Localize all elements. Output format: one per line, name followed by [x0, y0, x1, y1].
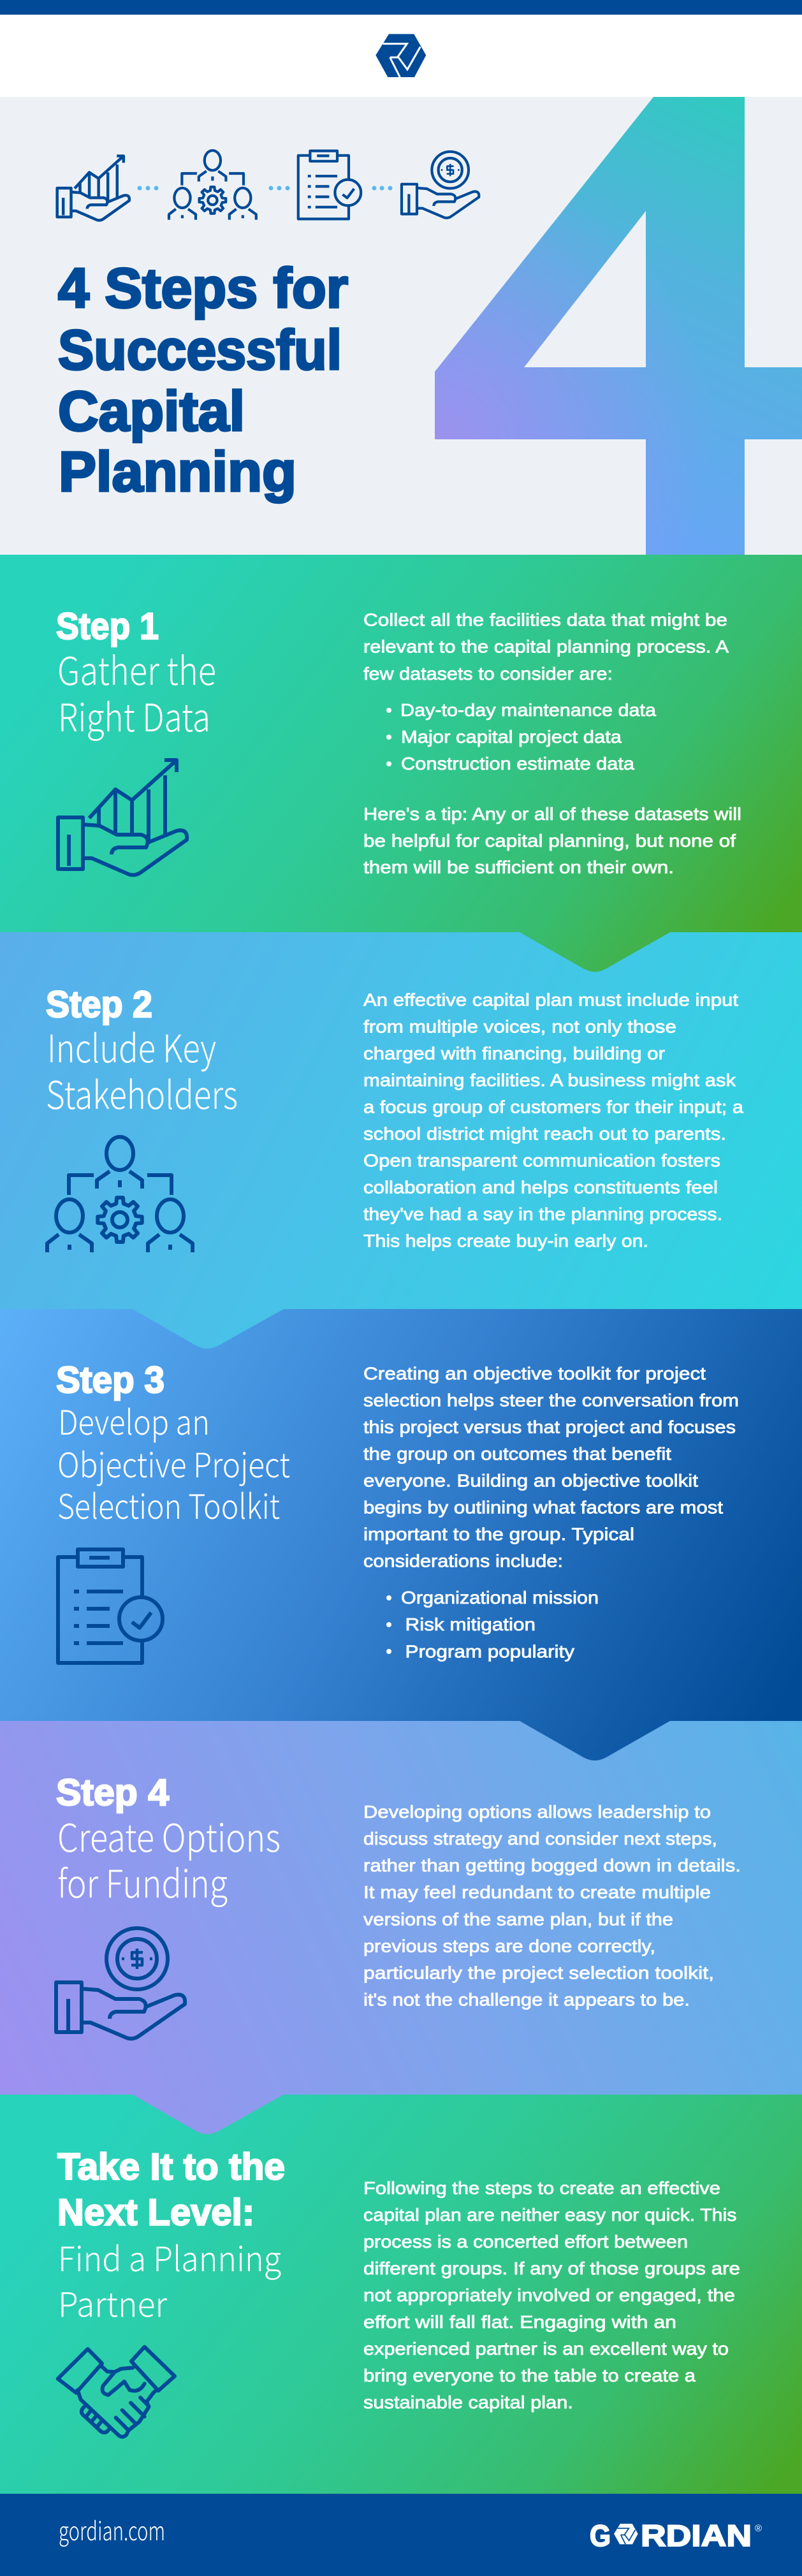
top bar: [0, 0, 802, 15]
body text: step 4: versions of the same plan, but if the: [363, 1909, 673, 1929]
icon: coin in hand: [56, 1928, 185, 2038]
icon: clipboard: [58, 1549, 163, 1663]
body text: step 2: This helps create buy-in early on.: [363, 1231, 648, 1251]
body text: step 4: Developing options allows leadership to: [363, 1802, 711, 1822]
body text: step 2: a focus group of customers for their input; a: [363, 1097, 743, 1117]
body text: step 3: Organizational mission: [401, 1588, 599, 1607]
body text: step 1: few datasets to consider are:: [363, 664, 613, 684]
body text: step 3: Program popularity: [405, 1641, 574, 1662]
footer logo: GORDIAN: RDIAN: [641, 2519, 752, 2552]
heading: step 2: Stakeholders: [46, 1065, 238, 1120]
body text: next level: sustainable capital plan.: [363, 2392, 573, 2412]
heading: next level: [57, 2146, 285, 2327]
heading: step 4: Create Options: [57, 1808, 281, 1863]
heading: step 1: Gather the: [57, 641, 216, 696]
body text: step 3: this project versus that project and focuses: [363, 1417, 736, 1437]
body text: step 3: everyone. Building an objective toolkit: [363, 1470, 698, 1491]
giant number 4: [435, 97, 802, 555]
body text: step 3: Creating an objective toolkit for project: [363, 1363, 706, 1384]
title: Planning: [59, 440, 296, 503]
body text: step 3: considerations include:: [363, 1551, 563, 1571]
dots: [372, 186, 393, 190]
icon row: [57, 150, 479, 221]
icon: stakeholders: [169, 150, 256, 220]
body text: step 4: [363, 1802, 741, 2010]
heading: next level: Find a Planning: [58, 2233, 281, 2281]
heading: next level: Take It to the: [57, 2146, 285, 2188]
body text: step 2: from multiple voices, not only those: [363, 1016, 676, 1037]
heading: step 3: Step 3: [56, 1359, 164, 1401]
heading: step 3: [56, 1359, 290, 1529]
heading: step 3: Selection Toolkit: [57, 1481, 280, 1529]
body text: step 2: Open transparent communication fosters: [363, 1150, 720, 1171]
heading: step 3: Develop an: [58, 1396, 210, 1445]
body text: step 3: begins by outlining what factors are most: [363, 1497, 723, 1518]
heading: step 2: Step 2: [46, 984, 152, 1025]
body text: step 1: Day-to-day maintenance data: [400, 700, 656, 720]
body text: step 2: they've had a say in the planning process.: [363, 1204, 722, 1224]
body text: step 4: previous steps are done correctly,: [363, 1936, 655, 1956]
arrow: step 4 notch: [133, 2095, 284, 2134]
panel: take it to the next level: [0, 2095, 802, 2494]
heading: step 1: Step 1: [56, 606, 159, 647]
arrow: step 3 notch: [520, 1721, 670, 1760]
heading: step 4: [56, 1772, 281, 1909]
body text: next level: effort will fall flat. Engaging with an: [363, 2312, 676, 2332]
body text: next level: experienced partner is an excellent way to: [363, 2339, 729, 2359]
body text: step 3: Risk mitigation: [405, 1614, 536, 1634]
body text: step 3: [363, 1363, 739, 1662]
title: Capital: [58, 379, 245, 443]
body text: step 4: discuss strategy and consider next steps,: [363, 1829, 717, 1848]
body text: step 1: them will be sufficient on their own.: [363, 857, 674, 877]
panel: step 1: [0, 555, 802, 932]
body text: step 3: important to the group. Typical: [363, 1524, 634, 1544]
title: Successful: [58, 318, 342, 381]
heading: step 2: Include Key: [47, 1018, 216, 1074]
header logo: [375, 34, 426, 77]
panel: step 2: [0, 932, 802, 1309]
icon: handshake: [58, 2347, 175, 2437]
panel: step 4: [0, 1721, 802, 2095]
body text: next level: bring everyone to the table to create a: [363, 2366, 696, 2385]
body text: step 2: An effective capital plan must include input: [363, 990, 738, 1010]
heading: step 3: Objective Project: [57, 1439, 290, 1488]
body text: step 3: selection helps steer the conversation from: [363, 1390, 739, 1410]
panel: hero: [0, 97, 802, 555]
body text: step 1: be helpful for capital planning, but none of: [363, 831, 736, 851]
body text: next level: [363, 2178, 740, 2412]
body text: step 1: Construction estimate data: [401, 754, 634, 773]
icon: stakeholders: [47, 1137, 193, 1252]
body text: step 1: Major capital project data: [401, 727, 622, 747]
heading: next level: Partner: [58, 2279, 168, 2327]
dots: [138, 186, 158, 190]
arrow: step 2 notch: [133, 1309, 284, 1349]
icon: chart in hand: [57, 156, 129, 221]
website: gordian.com: [59, 2511, 165, 2548]
body text: next level: different groups. If any of those groups are: [363, 2258, 740, 2278]
heading: step 2: [46, 984, 238, 1120]
body text: step 2: collaboration and helps constituents feel: [363, 1177, 718, 1197]
body text: step 3: the group on outcomes that benefit: [363, 1444, 671, 1464]
body text: step 2: charged with financing, building or: [363, 1043, 665, 1064]
footer logo: GORDIAN: G: [590, 2519, 611, 2552]
body text: next level: capital plan are neither easy nor quick. This: [363, 2205, 737, 2225]
body text: step 2: [363, 990, 743, 1251]
arrow: step 1 notch: [520, 932, 670, 972]
footer logo: GORDIAN: ®: [755, 2523, 762, 2534]
body text: step 4: it's not the challenge it appears to be.: [363, 1989, 690, 2010]
body text: step 2: school district might reach out to parents.: [363, 1123, 726, 1144]
body text: step 2: maintaining facilities. A business might ask: [363, 1070, 736, 1090]
panel: step 3: [0, 1309, 802, 1721]
title: [58, 256, 348, 503]
heading: step 1: Right Data: [58, 687, 210, 743]
heading: step 4: for Funding: [57, 1854, 228, 1909]
title: 4 Steps for: [58, 256, 348, 319]
body text: step 4: particularly the project selection toolkit,: [363, 1963, 714, 1983]
body text: next level: Following the steps to create an effective: [363, 2178, 720, 2198]
body text: step 1: Here's a tip: Any or all of these datasets will: [363, 804, 741, 824]
body text: step 4: It may feel redundant to create multiple: [363, 1882, 711, 1902]
dots: [269, 186, 289, 190]
body text: next level: process is a concerted effort between: [363, 2232, 688, 2251]
icon: coin in hand: [402, 152, 479, 218]
body text: step 4: rather than getting bogged down in details.: [363, 1855, 741, 1875]
body text: next level: not appropriately involved or engaged, the: [363, 2285, 735, 2305]
heading: next level: Next Level:: [57, 2192, 254, 2233]
footer: [0, 2494, 802, 2576]
body text: step 1: Collect all the facilities data that might be: [363, 610, 727, 630]
icon: chart in hand: [58, 760, 187, 875]
heading: step 1: [56, 606, 216, 743]
heading: step 4: Step 4: [56, 1772, 169, 1813]
icon: clipboard: [298, 151, 361, 219]
footer logo: GORDIAN: [590, 2519, 762, 2552]
body text: step 1: relevant to the capital planning process. A: [363, 636, 729, 657]
body text: step 1: [363, 610, 741, 877]
